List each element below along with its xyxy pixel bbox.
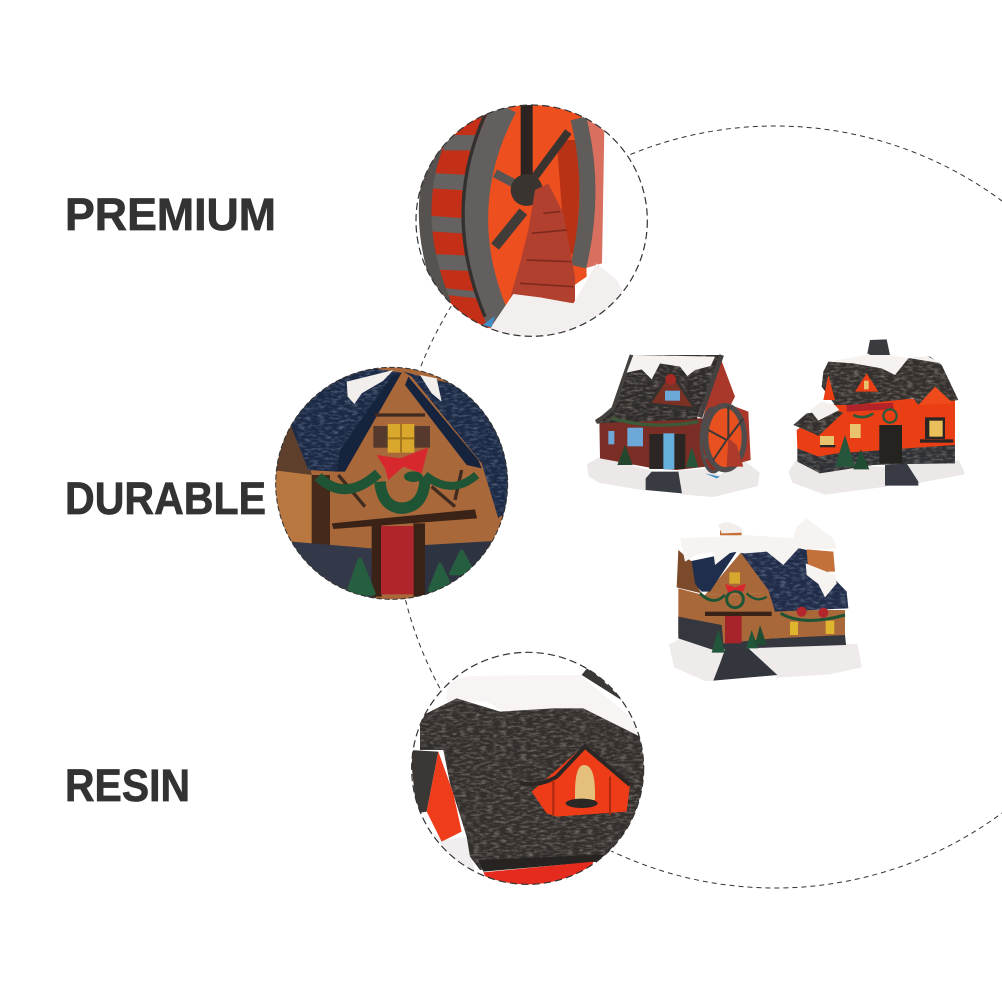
heading: PREMIUM: PREMIUM [65,189,276,240]
house: brown cottage with blue roof [670,518,861,681]
heading: DURABLE: DURABLE [65,473,266,524]
large dashed connecting circle [394,126,1002,888]
detail circle: water wheel [413,100,649,343]
detail circle: textured roof [410,651,647,887]
house: red brick mill with water wheel [588,355,758,496]
house: orange cottage with thatched roof [790,339,963,493]
heading: RESIN: RESIN [65,760,190,811]
detail circle: gable with wreath [272,366,512,607]
